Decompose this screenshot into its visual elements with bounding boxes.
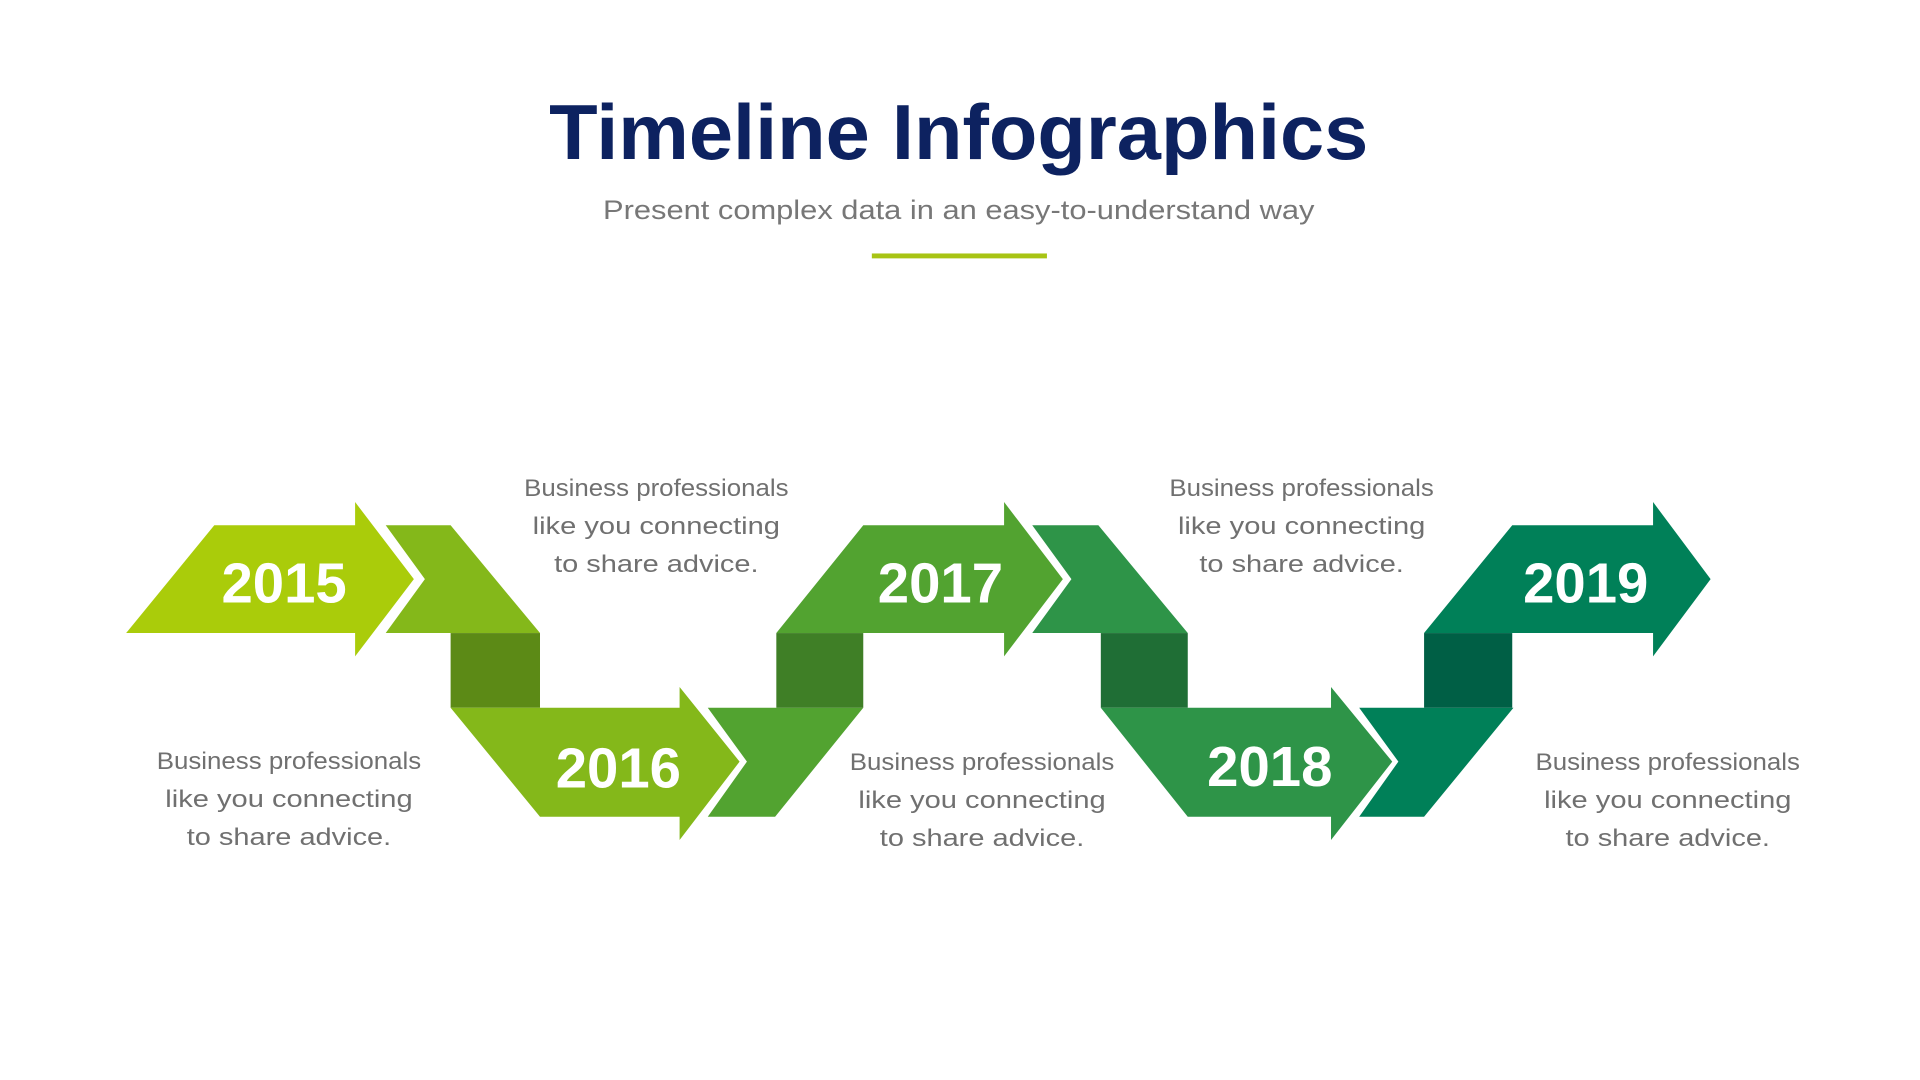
text: 2016 description: Business professionals xyxy=(524,475,789,502)
subtitle: Present complex data in an easy-to-understand way xyxy=(603,195,1315,225)
text: 2017 description: like you connecting xyxy=(858,787,1106,814)
text: 2019 description: like you connecting xyxy=(1544,787,1791,814)
text: 2016 description: like you connecting xyxy=(533,513,780,540)
arrow: 2018: 2018 xyxy=(1207,735,1332,798)
text: 2019 description xyxy=(1536,749,1800,852)
arrow: 2019: 2019 xyxy=(1523,551,1648,614)
connector 4 xyxy=(1424,633,1512,708)
text: 2015 description: like you connecting xyxy=(165,786,413,813)
text: 2018 description: to share advice. xyxy=(1199,551,1404,578)
arrow: 2017 xyxy=(776,502,1063,656)
text: 2017 description xyxy=(850,749,1114,852)
connector 2 xyxy=(776,633,863,708)
arrow: 2015 xyxy=(126,502,414,656)
text: 2016 description: to share advice. xyxy=(554,551,759,578)
arrow: 2017: 2017 xyxy=(878,551,1003,614)
fold 2 xyxy=(708,708,863,817)
arrow: 2019 xyxy=(1424,502,1711,656)
text: 2015 description: to share advice. xyxy=(187,824,391,851)
fold 3 xyxy=(1032,525,1188,633)
text: 2018 description xyxy=(1169,475,1434,578)
text: 2019 description: Business professionals xyxy=(1536,749,1800,776)
text: 2017 description: Business professionals xyxy=(850,749,1114,776)
arrow: 2018 xyxy=(1101,687,1392,840)
timeline ribbon xyxy=(126,502,1711,840)
title: Timeline Infographics xyxy=(549,88,1368,176)
text: 2015 description xyxy=(157,748,421,851)
accent underline xyxy=(872,253,1047,258)
connector 1 xyxy=(451,633,540,708)
text: 2017 description: to share advice. xyxy=(880,825,1084,852)
arrow: 2016: 2016 xyxy=(556,736,681,799)
arrow: 2015: 2015 xyxy=(221,551,347,614)
connector 3 xyxy=(1101,633,1188,708)
text: 2016 description xyxy=(524,475,789,578)
text: 2019 description: to share advice. xyxy=(1566,825,1770,852)
arrow: 2016 xyxy=(451,687,740,840)
text: 2015 description: Business professionals xyxy=(157,748,421,775)
text: 2018 description: like you connecting xyxy=(1178,513,1425,540)
fold 1 xyxy=(386,525,540,633)
text: 2018 description: Business professionals xyxy=(1169,475,1434,502)
fold 4 xyxy=(1359,708,1513,817)
